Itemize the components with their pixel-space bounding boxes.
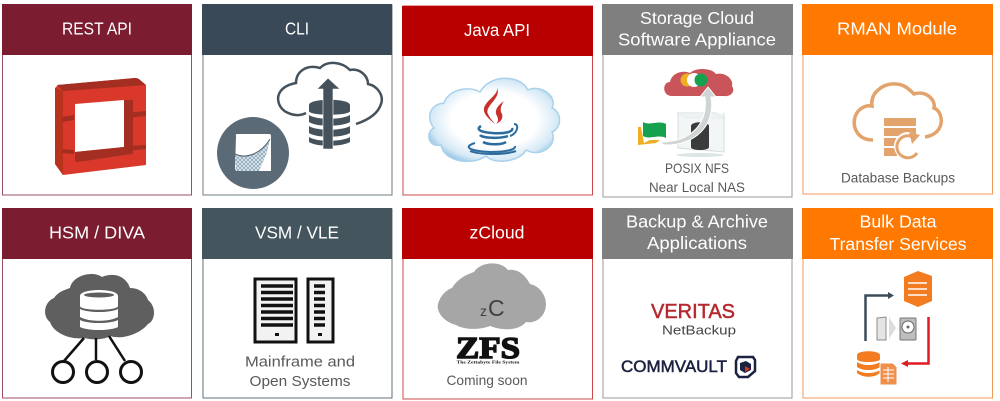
logo: ZFS: ZFS	[456, 330, 520, 365]
logo: ZFS: The Zettabyte File System	[456, 360, 520, 364]
icon: grey zC cloud: z	[480, 303, 487, 319]
header: zCloud	[402, 208, 593, 259]
panel: Java API	[402, 6, 593, 195]
panel: HSM / DIVA	[2, 208, 192, 398]
icon: cloud upload database	[278, 63, 382, 149]
header: Bulk Data Transfer Services: Bulk Data	[860, 212, 937, 232]
logo: Commvault: COMMVAULT	[621, 358, 727, 376]
header: Storage Cloud Software Appliance: Storage Cloud	[640, 8, 754, 28]
icon: orange server	[904, 271, 932, 307]
panel: Backup & Archive Applications	[602, 208, 793, 398]
icon: cloud database backup	[854, 84, 941, 160]
header: zCloud: zCloud	[470, 222, 524, 242]
panel: REST API	[2, 4, 192, 195]
header: Storage Cloud Software Appliance: Software Appliance	[618, 30, 776, 50]
header: REST API: REST API	[62, 18, 132, 38]
header: HSM / DIVA: HSM / DIVA	[49, 222, 145, 242]
header: Java API: Java API	[464, 20, 530, 40]
icon: server and hard drive	[877, 317, 916, 340]
caption: Mainframe and Open Systems: Mainframe and	[245, 354, 355, 370]
header: RMAN Module: RMAN Module	[837, 18, 957, 38]
panel: zCloud	[402, 208, 593, 399]
logo: Veritas NetBackup: NetBackup	[662, 322, 736, 338]
header: VSM / VLE: VSM / VLE	[255, 222, 339, 242]
panel: VSM / VLE	[202, 208, 392, 398]
panel: RMAN Module	[802, 4, 993, 194]
header: Java API	[402, 6, 593, 56]
header: REST API	[2, 4, 192, 55]
arrow: dark up and right	[866, 292, 894, 341]
panel: Bulk Data Transfer Services	[802, 208, 993, 398]
caption: POSIX NFS Near Local NAS: Near Local NAS	[649, 179, 745, 195]
header: Backup & Archive Applications: Backup & Archive	[626, 212, 768, 232]
header: Storage Cloud Software Appliance	[602, 4, 793, 55]
logo: Veritas NetBackup	[651, 300, 736, 338]
panel: CLI	[202, 4, 392, 195]
caption: POSIX NFS Near Local NAS: POSIX NFS	[665, 160, 729, 176]
icon: mesh circle badge	[217, 117, 289, 189]
icon: OpenStack logo	[55, 78, 146, 175]
header: HSM / DIVA	[2, 208, 192, 259]
caption: Mainframe and Open Systems: Open Systems	[250, 373, 350, 390]
header: CLI: CLI	[285, 18, 309, 38]
icon: server racks	[255, 279, 333, 342]
header: CLI	[202, 4, 392, 55]
logo: Commvault	[621, 357, 755, 377]
arrow: red down and left	[901, 317, 928, 367]
header: RMAN Module	[802, 4, 993, 55]
icon: Java cloud	[429, 78, 560, 161]
logo: Veritas NetBackup: VERITAS	[651, 300, 735, 323]
icon: grey zC cloud	[438, 263, 546, 329]
caption: Database Backups: Database Backups	[841, 170, 955, 186]
header: Bulk Data Transfer Services: Transfer Services	[830, 234, 967, 254]
caption: Coming soon: Coming soon	[446, 372, 528, 388]
header: VSM / VLE	[202, 208, 392, 259]
icon: cloud gateway	[638, 69, 733, 157]
caption: Mainframe and Open Systems	[245, 354, 355, 390]
header: Bulk Data Transfer Services	[802, 208, 993, 259]
icon: database and document	[857, 351, 897, 385]
header: Backup & Archive Applications: Applications	[647, 233, 747, 253]
caption: POSIX NFS Near Local NAS	[649, 160, 745, 195]
header: Backup & Archive Applications	[602, 208, 793, 259]
icon: cloud storage network	[45, 274, 154, 382]
icon: grey zC cloud: C	[488, 295, 505, 321]
panel: Storage Cloud Software Appliance	[602, 4, 793, 197]
